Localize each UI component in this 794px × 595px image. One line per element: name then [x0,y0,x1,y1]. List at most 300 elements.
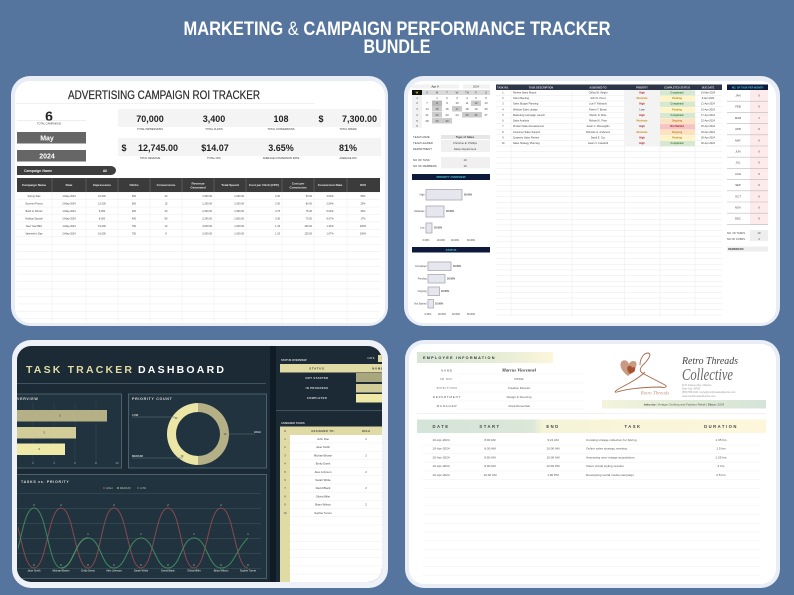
campaign table: 1.43% [326,225,334,228]
panel: task tracker dashboard [7,340,388,588]
total campaigns: TOTAL CAMPAIGNS [37,122,61,126]
task table: 8-Apr-2024 [702,97,715,100]
tasks vs priority line chart: 0 [167,563,169,567]
campaign table: 1,500.00 [202,195,213,198]
calendar: 1 [416,96,418,100]
employee information: ID NO. [440,377,454,381]
task table: Ongoing [672,131,683,134]
campaign table: 16,000 [98,232,106,236]
calendar: 26 [474,113,478,117]
timesheet table: Curating vintage collection for Spring [586,438,637,442]
campaign table: 8,000 [99,210,106,213]
task table: Nicholas G. Anderson [586,131,611,134]
task table: Robert T. Brown [589,108,608,111]
status overview table: STATUS [309,366,325,370]
tasks per month column: DEC [735,217,741,221]
assigned tasks table: 4 [284,462,286,466]
KPI cards: TOTAL REVENUE [140,157,161,160]
calendar: 22 [435,113,439,117]
priority overview chart: 20.00% [437,239,446,242]
table header: ASSIGNED TO [589,86,607,89]
month and year selectors [17,132,86,162]
heading: ROI tracker: ADVERTISING CAMPAIGN ROI TRACKER [68,90,260,102]
campaign table: 8 [165,232,167,236]
KPI cards: 81% [339,143,357,153]
tasks per month column: 9 [758,127,760,131]
campaign table: 1-May-2024 [62,195,76,198]
task table: Ongoing [672,120,683,123]
calendar: 17 [455,107,459,111]
task table: 23-Mar-2024 [701,92,716,94]
task table: 5 [502,114,504,117]
calendar: 10 [455,101,459,105]
campaign table [17,178,380,323]
timesheet table: Assessing new vintage acquisitions [586,455,635,459]
timesheet table: 1.25 hrs [715,455,727,459]
tasks vs priority line chart: 0 [193,563,195,567]
tasks vs priority line chart: 2 [33,503,35,507]
campaign table: 15,000 [98,225,106,228]
tasks vs priority line chart [7,474,266,578]
table header: Cost per [292,181,305,185]
total campaigns [17,108,86,126]
calendar: 1 [436,96,438,100]
calendar: 30 [445,119,449,123]
tasks per month column: MAY [735,138,741,142]
campaign table: 50.00 [306,195,313,198]
month and year selectors: May [40,136,54,142]
team details: TEAM NAME [413,135,430,139]
calendar: 2024 [473,85,480,89]
industry banner [602,400,766,408]
timesheet table: 8:00 AM [484,438,496,442]
tasks per month column: 0 [758,172,760,176]
campaign table: 2,000.00 [202,210,213,213]
task table: 1 [502,92,504,94]
overview bar chart: 3 [43,430,45,434]
task table: 10 [502,142,505,145]
priority overview chart [412,174,490,242]
table header: TASK NO. [497,86,509,89]
tasks vs priority line chart: Sarah White [134,568,149,572]
task table: 25-Apr-2024 [701,125,716,128]
campaign table: 10 [165,225,168,228]
tasks per month column: AUG [735,172,741,176]
panel: team task tracker [404,76,780,326]
task table: Marketing Campaign Launch [513,114,546,117]
KPI cards: 70,000 [136,114,164,124]
campaign table: 400 [132,218,137,220]
tasks vs priority line chart: 0 [33,563,35,567]
company name and address: 1137 Antique Alley, Oldtown [682,384,712,387]
status chart: STATUS [446,248,457,252]
calendar: S [485,90,487,94]
task table: Review Sales Report [513,92,537,94]
table header: Date [66,183,73,187]
status chart: Completed [415,265,427,268]
campaign table: 2.00 [275,202,281,206]
task table: Moderate [636,131,648,134]
tasks per month column: JUN [735,150,741,154]
tasks vs priority line chart: Emily Davis [81,568,95,572]
tasks per month column: 0 [758,138,760,142]
table header: Conversions [157,183,176,187]
KPI cards: 7,300.00 [342,114,377,124]
task table: High [639,92,645,94]
task table: Moderate [636,120,648,123]
tasks per month column [727,84,768,225]
title: MARKETING & CAMPAIGN PERFORMANCE TRACKER [184,19,611,40]
assigned tasks table: 10 [283,511,287,515]
priority overview chart: PRIORITY OVERVIEW [437,175,466,179]
tasks vs priority line chart: 0 [87,563,89,567]
team details: Sales Department [454,147,476,151]
task totals and reminders [727,230,768,252]
task table: 3 [502,103,504,106]
task totals and reminders: NO OF COMPL. [727,237,746,241]
campaign table: Spring Sale [28,195,41,198]
task table: Website Sales Update [513,108,538,111]
task table: 26-Apr-2024 [701,131,716,134]
team details [413,135,490,168]
priority overview chart: High [420,194,425,196]
tasks vs priority line chart: 0 [220,563,222,567]
calendar: Apr 0 [431,85,439,89]
tasks vs priority line chart: 0 [247,563,249,567]
campaign table: 2.00 [275,195,281,198]
assigned tasks table: David Black [316,486,331,490]
title [184,19,611,58]
priority count donut: PRIORITY COUNT [132,397,173,401]
task table: Marvin D. Wise [590,114,607,117]
tasks vs priority line chart: 2 [220,503,222,507]
tasks per month column: OCT [735,194,741,198]
campaign table: 100% [360,232,367,236]
icon: heart and hanger logo: Retro Threads [640,392,669,396]
calendar: 20 [484,107,488,111]
task table: 22-Apr-2024 [701,120,716,123]
tasks per month column: 1 [758,116,760,120]
table header: Generated [190,186,206,190]
tasks vs priority line chart: 1 [193,532,195,536]
status overview table: DATE [368,356,375,360]
campaign table: 500 [132,195,137,198]
tasks per month column: 0 [758,161,760,165]
task table: Jason V. Crawford [588,142,609,145]
campaign table: 50% [360,195,366,198]
KPI cards: TOTAL SPEND [339,128,357,131]
table header: COMPLETED STATUS [664,86,690,89]
tasks per month column: JAN [735,94,741,98]
status chart [412,247,490,316]
overview bar chart: 2 [32,461,34,465]
task totals and reminders: NO. OF TASKS [727,231,745,235]
task table: Not Started [670,125,684,128]
task table: 8 [502,131,504,134]
campaign table: 400 [132,210,137,213]
status chart: Not Started [414,302,427,306]
table header: PRIORITY [636,86,648,89]
tasks per month column: 0 [758,206,760,210]
employee information [417,352,584,409]
assigned tasks table: John Doe [317,437,329,441]
table header [496,84,722,90]
tasks vs priority line chart: Olivia Miller [187,568,201,572]
priority overview chart: Low [420,226,425,230]
priority count donut [128,394,266,468]
campaign table: 2,000.00 [202,232,213,236]
task table: Customer Sales Support [513,131,541,134]
priority overview chart: 50.00% [464,194,473,196]
campaign table: 1,250.00 [202,202,213,206]
calendar: 13 [484,101,488,105]
campaign table: 20 [165,195,168,198]
dashboard heading [26,366,224,373]
team details: NO OF MEMBERS [413,164,437,168]
calendar: 2 [416,101,418,105]
assigned tasks table [280,421,384,582]
timesheet table: Developing social media campaign [586,473,634,477]
task table: Richard K. Price [589,120,608,123]
campaign table: 1-May-2024 [62,210,76,213]
assigned tasks table: 1 [284,437,286,441]
KPI cards: $ [318,114,324,124]
priority count donut: HIGH [254,430,261,434]
task table: High [639,103,645,106]
KPI cards: 108 [273,114,289,124]
company name and address: (865) 555-0101 | style@retrothreadscollective.com [682,391,736,394]
assigned tasks table: Jane Smith [316,445,330,449]
dashboard heading: DASHBOARD [138,364,224,376]
task table: 15-Apr-2024 [701,108,716,111]
overview bar chart: 6 [74,461,76,465]
employee information: MANAGER [437,404,457,408]
campaign table: 15 [165,202,168,206]
priority overview chart: Moderate [414,210,425,213]
campaign table: 125.00 [304,232,313,236]
campaign table: 600 [132,202,137,206]
tasks per month column: JUL [736,161,741,165]
campaign table: 3.36 [275,218,281,220]
calendar: 6 [416,124,418,128]
task table: Sales Budget Planning [513,103,539,106]
table header: Total Spend [221,183,239,187]
tasks per month column: NOV [735,206,741,210]
assigned tasks table: ASSIGNED TASKS [281,421,305,425]
tasks per month column: 0 [758,194,760,198]
calendar: W [456,90,459,94]
tasks vs priority line chart: 2 [167,503,169,507]
timesheet table: 2.5 hrs [716,473,726,477]
calendar: 9 [446,101,448,105]
task table: Pending [672,97,682,100]
total campaigns: 6 [45,108,53,124]
chart legend: HIGH [106,486,113,490]
calendar: 12 [474,101,478,105]
timesheet table: 10-Apr-2024 [432,447,450,451]
assigned tasks table: 8 [284,494,286,498]
tasks vs priority line chart: 2 [60,503,62,507]
overview bar chart [10,394,122,468]
campaign table: 3.75 [275,210,281,213]
calendar: 24 [455,113,459,117]
status overview table: IN PROGRESS [306,386,328,390]
overview bar chart: VERVIEW [17,397,38,401]
campaign table: 5.00% [326,210,334,213]
campaign table: Back to School [26,210,43,213]
task table: 30-Apr-2024 [701,142,716,145]
team details: Tiger of Sales [456,135,475,139]
calendar: F [475,90,477,94]
tasks vs priority line chart: 0 [113,563,115,567]
table header: TASK DESCRIPTION [529,86,553,89]
status overview table: NUMB [372,366,384,370]
tasks per month column: MAR [735,116,741,120]
calendar: 5 [475,96,477,100]
campaign name slicer: All [103,169,107,173]
calendar: 23 [445,113,449,117]
calendar: 8 [436,101,438,105]
calendar: S [426,90,428,94]
timesheet table: 10-Apr-2024 [432,455,450,459]
task table: Completed [671,142,684,145]
tasks vs priority line chart: 1 [140,532,142,536]
table header: Impressions [93,183,111,187]
task table: 28-Apr-2024 [701,136,716,140]
campaign name slicer: Campaign Name [24,169,52,173]
team details: NO OF TASK [413,158,430,162]
timesheet table: Client virtual styling session [586,464,624,468]
tasks per month column: 0 [758,94,760,98]
tasks vs priority line chart: 1 [247,532,249,536]
calendar: 11 [466,101,469,105]
overview bar chart: 10 [116,461,119,465]
status chart: 10.00% [435,302,444,306]
tasks vs priority line chart: 0 [60,563,62,567]
status chart: 60.00% [467,313,476,316]
industry banner: Industry: Vintage Clothing and Fashion Retail | Since: 2024 [644,402,725,406]
assigned tasks table: 2 [284,445,286,449]
campaign table: 1,000.00 [234,202,245,206]
tasks vs priority line chart: 1 [87,532,89,536]
icon: heart and hanger logo [615,353,669,396]
assigned tasks table: 7 [284,486,286,490]
tasks vs priority line chart: Jane Smith [28,568,41,572]
campaign table: Holiday Special [25,218,43,220]
tasks vs priority line chart: David Black [161,568,176,572]
calendar: 25 [465,113,469,117]
timesheet table [417,420,766,582]
timesheet table: 12:00 PM [546,464,560,468]
calendar: 2 [446,96,448,100]
KPI cards: TOTAL IMPRESSIONS [137,128,163,131]
tasks per month column: APR [735,127,741,131]
team details: Christine E. Phillips [453,141,478,145]
team details: DEPARTMENT [413,147,432,151]
timesheet table: 10:30 AM [483,473,497,477]
table header: Clicks [129,183,139,187]
task table: John D. Perez [590,97,607,100]
task table: 7 [502,125,504,128]
employee information: POSITION [437,386,457,390]
panel: employee timesheet [405,340,780,588]
KPI cards: TOTAL CPC [207,157,221,160]
campaign table: 3,000.00 [202,225,213,228]
timesheet table: 9:00 AM [484,464,496,468]
calendar: 28 [425,119,429,123]
calendar: 29 [435,119,439,123]
task table: Quarterly Sales Review [513,136,539,140]
task table: 9 [502,136,504,140]
task table: High [639,136,645,140]
campaign table: 200% [360,225,367,228]
assigned tasks table: Alex Johnson [315,470,332,474]
KPI cards: 3.65% [268,143,294,153]
assigned tasks table: Olivia Miller [316,494,330,498]
timesheet table: 8:50 AM [484,455,496,459]
task table: David E. Cox [591,136,606,140]
campaign table: 17% [360,218,366,220]
employee information: EMPLOYEE INFORMATION [423,356,496,360]
campaign table: 1,000.00 [234,225,245,228]
calendar: 27 [484,113,488,117]
campaign table: 2-May-2024 [62,218,76,220]
assigned tasks table: 9 [284,503,286,507]
panel: advertising campaign ROI tracker [11,76,388,326]
chart legend [103,487,146,489]
task totals and reminders: 4 [758,237,760,241]
company name and address [681,356,738,398]
priority overview chart: 30.00% [446,210,455,213]
priority count donut: MEDIUM [132,454,144,458]
company name and address: Retro Threads [681,356,738,367]
campaign table: 8,000 [99,218,106,220]
campaign table: 75.00 [306,210,313,213]
status overview table: NOT STARTED [306,376,328,380]
timesheet table: 10-Apr-2024 [432,464,450,468]
priority overview chart: 0.00% [423,239,430,242]
tasks per month column: SEP [735,183,741,187]
campaign table: 1,500.00 [234,210,245,213]
tasks vs priority line chart: Sophie Turner [240,568,256,572]
calendar: 14 [425,107,429,111]
calendar: 16 [445,107,449,111]
campaign table: 100.00 [304,225,313,228]
campaign table: Summer Promo [25,202,43,206]
tasks vs priority line chart: Michael Brown [52,568,70,572]
task table: High [639,142,645,145]
priority overview chart: 60.00% [467,239,476,242]
priority count donut: 30 [175,417,178,420]
task table: High [639,114,645,117]
employee information: DEPARTMENT [433,395,461,399]
campaign table: 8.07% [326,218,334,220]
task table: 17-Apr-2024 [701,114,716,117]
campaign table: 12,000 [98,202,106,206]
assigned tasks table: Emily Davis [316,462,331,466]
table header: DUE DATE [702,86,715,89]
overview bar chart: 8 [95,461,97,465]
status overview table [280,355,384,402]
timesheet table: DATE [432,424,450,429]
campaign name slicer [17,166,116,175]
timesheet table: 3 hrs [718,464,725,468]
priority count donut: 30 [181,455,184,458]
status chart: 20.00% [438,313,447,316]
timesheet table: 9:21 AM [547,438,559,442]
team details: 10 [463,158,467,162]
calendar: 5 [416,119,418,123]
